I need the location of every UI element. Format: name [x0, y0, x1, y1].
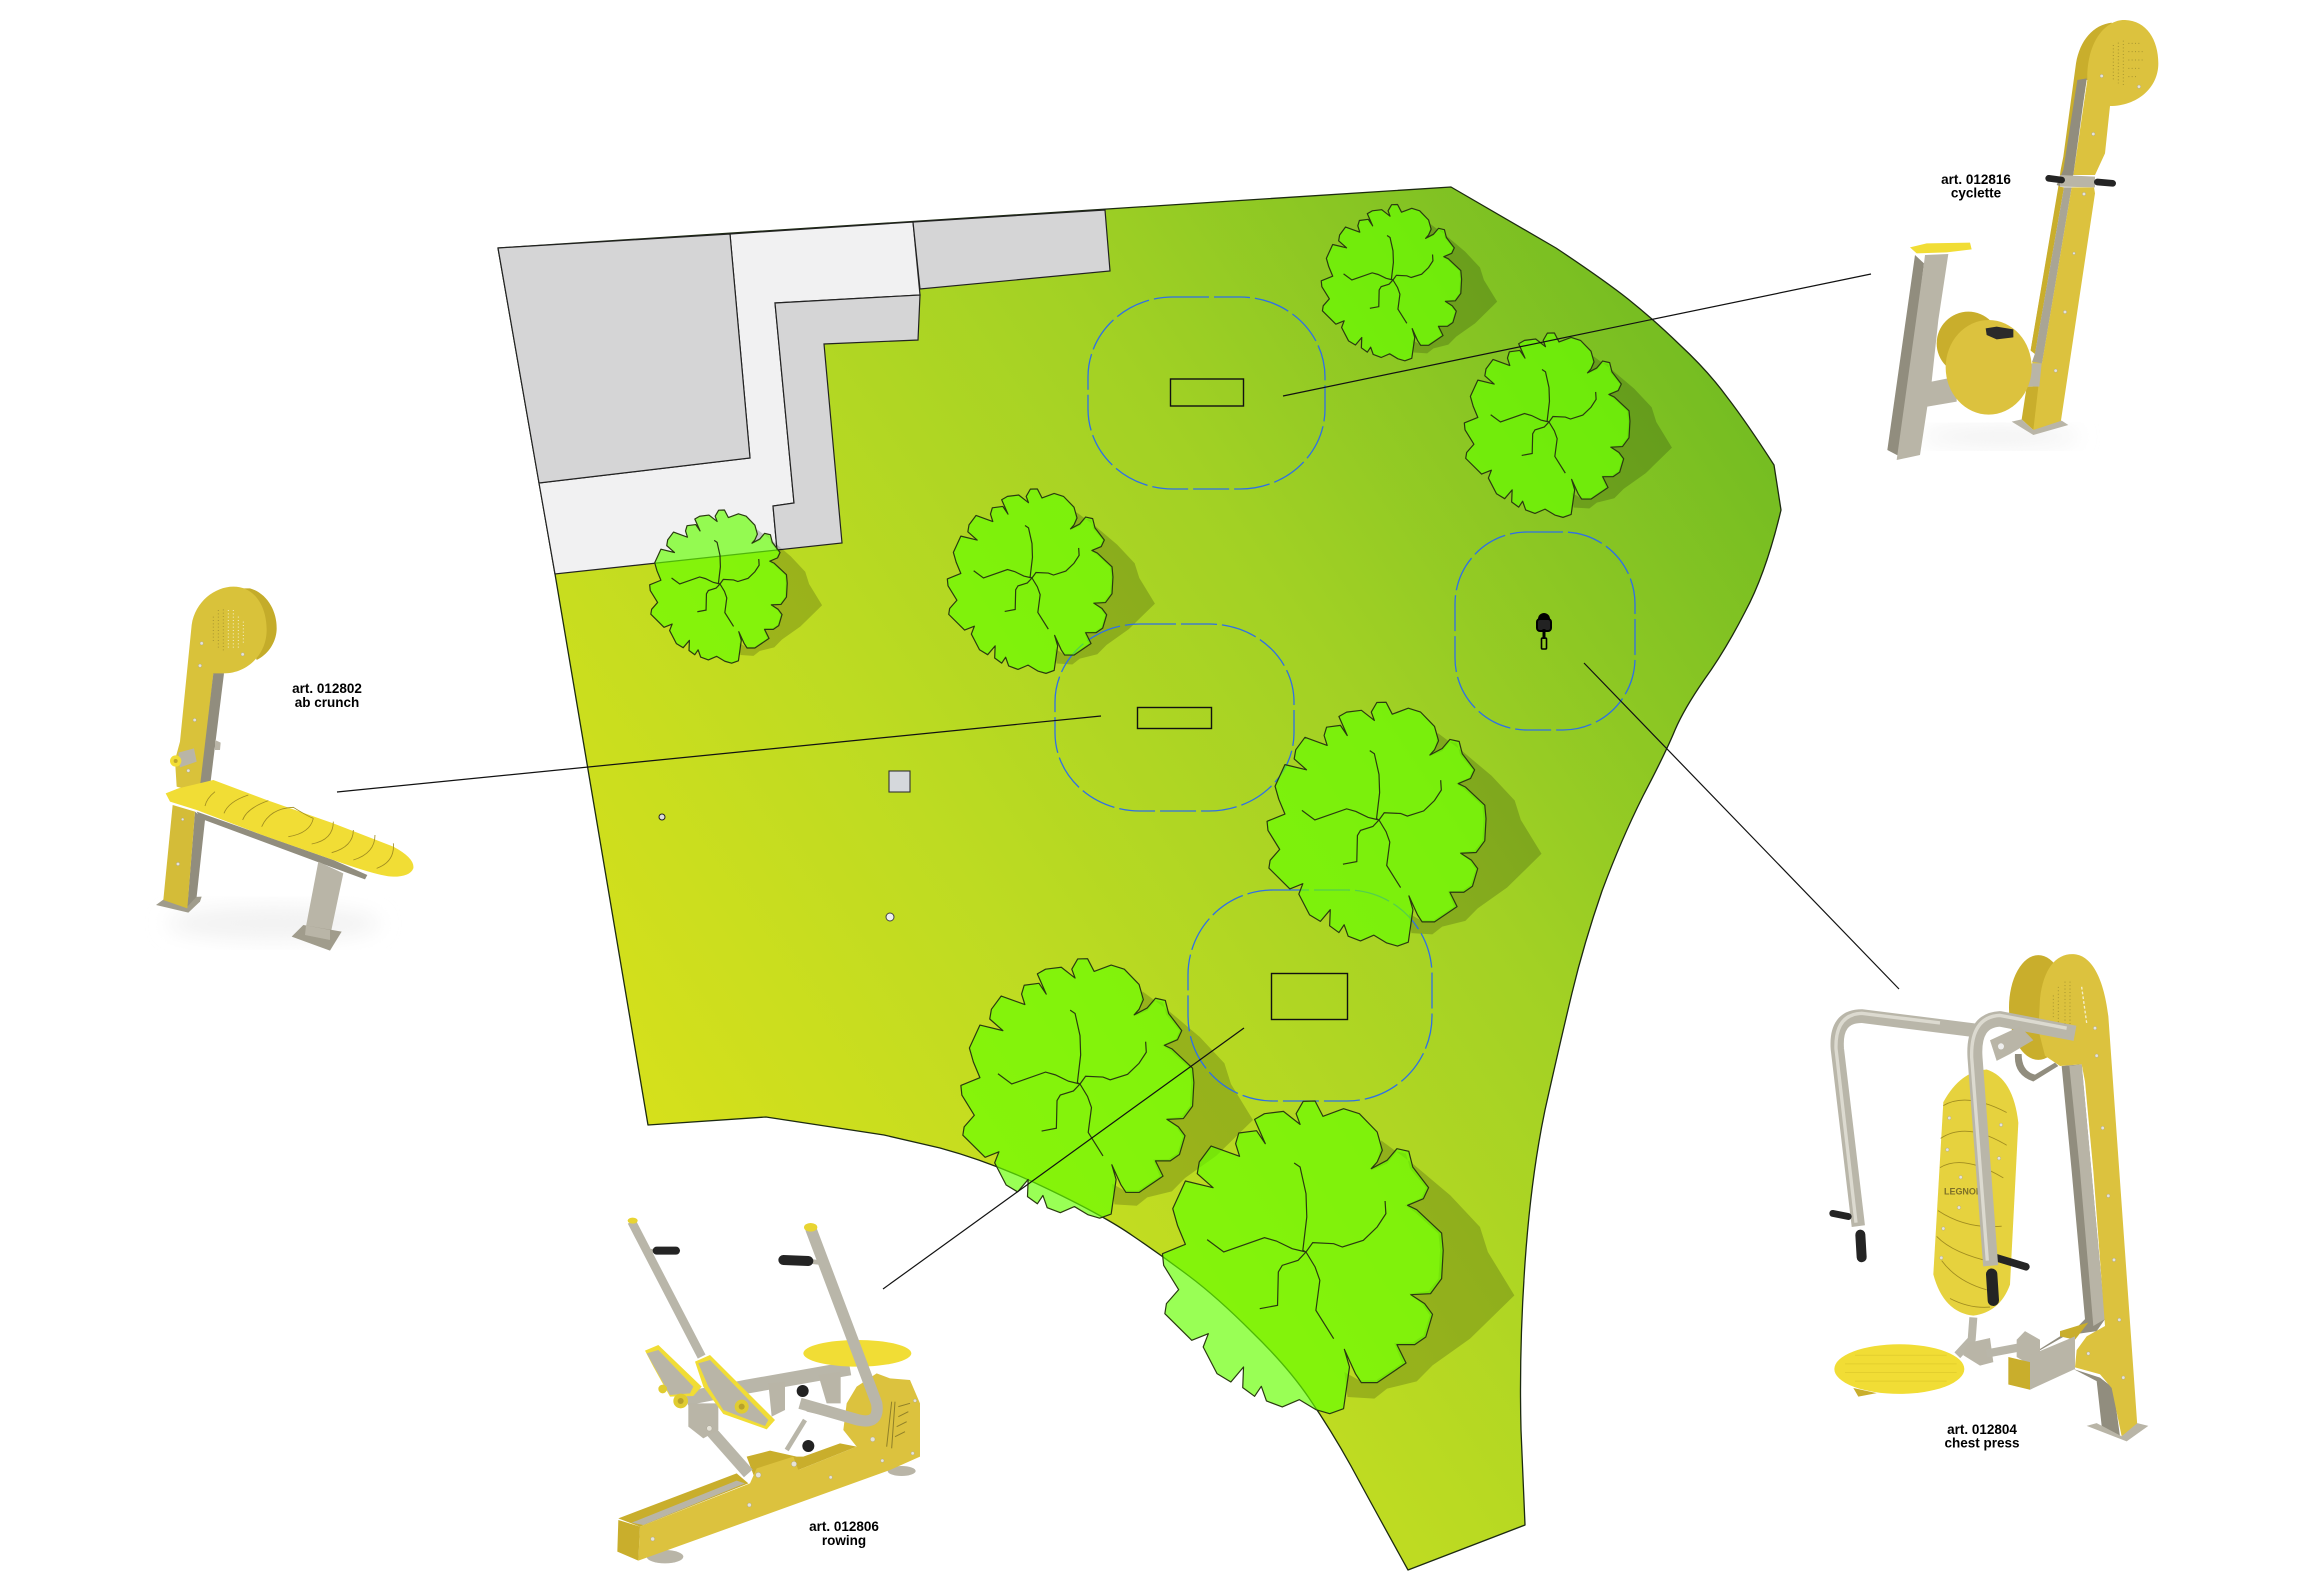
exercise zone dashed outline: chest press: [1455, 532, 1635, 730]
leader line: cyclette: [1283, 274, 1871, 396]
equipment footprint: cyclette: [1170, 379, 1244, 406]
tree 7: [1162, 1101, 1443, 1414]
equipment footprint: ab crunch: [1138, 708, 1212, 728]
equipment: rowing: [617, 1218, 920, 1563]
tree 6: [961, 959, 1194, 1218]
label: cyclette: art. 012816: [1941, 172, 2011, 187]
label: chest press: chest press: [1944, 1436, 2020, 1451]
small point marker: [659, 814, 665, 820]
lawn parcel: [498, 187, 1781, 1570]
label: ab crunch: art. 012802: [292, 681, 362, 696]
grey L-shaped block: [773, 295, 920, 550]
label: rowing: rowing: [822, 1533, 866, 1548]
small point marker: [886, 913, 894, 921]
label: cyclette: cyclette: [1951, 185, 2002, 200]
equipment: ab crunch: [156, 587, 413, 951]
square marker: [889, 771, 910, 792]
tree 1: [650, 510, 787, 663]
label: ab crunch: ab crunch: [295, 695, 359, 710]
leader line: chest press: [1584, 663, 1899, 989]
exercise zone dashed outline: cyclette: [1088, 297, 1325, 489]
leader line: ab crunch: [337, 716, 1101, 792]
equipment: chest press: LEGNOLA: [1944, 1186, 1988, 1196]
equipment: chest press: [1833, 954, 2148, 1441]
grey building block left: [498, 234, 750, 483]
icon: chest press footprint: [1537, 613, 1551, 649]
exercise zone dashed outline: rowing: [1188, 890, 1432, 1101]
pale paved path: [539, 222, 920, 574]
leader line: rowing: [883, 1028, 1244, 1289]
tree 2: [947, 489, 1113, 673]
tree shadows: [739, 224, 1672, 1399]
tree 4: [1464, 333, 1630, 517]
tree 3: [1321, 205, 1462, 361]
label: rowing: art. 012806: [809, 1519, 879, 1534]
grey building block top: [913, 210, 1110, 289]
tree 5: [1267, 702, 1486, 946]
equipment: cyclette: [1887, 20, 2158, 460]
equipment footprint: rowing: [1272, 974, 1348, 1020]
label: chest press: art. 012804: [1947, 1422, 2017, 1437]
exercise zone dashed outline: ab crunch: [1055, 624, 1294, 811]
